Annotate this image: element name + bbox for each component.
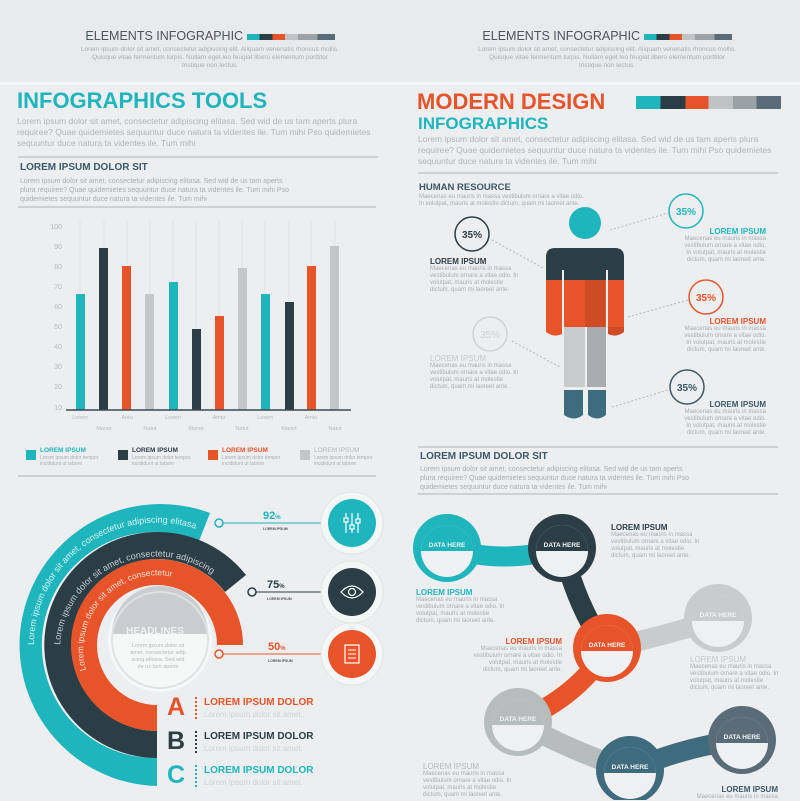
human figure: 35%	[696, 293, 716, 304]
bar chart: Lorem	[72, 415, 88, 421]
text: LOREM IPSUM	[416, 588, 472, 597]
ABC list: Lorem ipsum dolor sit amet.	[204, 710, 303, 719]
text: Maecenas eu mauris in massa vestibulum ornare a vitae odio. In volutpat, mauris at molestie dictum, quam mi laoreet ante.	[474, 646, 562, 673]
network diagram: DATA HERE	[589, 642, 626, 649]
text: LOREM IPSUM	[710, 317, 766, 326]
bar chart: Antu	[121, 415, 133, 421]
ABC list: LOREM IPSUM DOLOR	[204, 697, 313, 708]
intro text left: Lorem ipsum dolor sit amet, consectetur adipiscing elitasa. Sed wid de us tam aperts plura requiree? Quae quidemietes sequuntur duce natura ta videntes ile. Tum mihi Pso quidemietes sequuntur duce natura ta videntes ile. Tum mihi	[17, 116, 370, 148]
text: Lorem ipsum dolor sit amet, consectetur adipiscing elitasa. Sed wid de us tam aperts plura requiree? Quae quidemietes sequuntur duce natura ta videntes ile. Tum mihi Pso quidemietes sequuntur duce natura ta videntes ile. Tum mihi	[20, 178, 289, 203]
header right	[478, 29, 736, 69]
text: Maecenas eu mauris in massa vestibulum ornare a vitae odio. In volutpat, mauris at molestie dictum, quam mi laoreet ante.	[690, 664, 778, 691]
subtitle: INFOGRAPHICS	[418, 114, 548, 133]
bar chart: Natut	[235, 426, 249, 432]
network labels: Maecenas eu mauris in massa vestibulum ornare a vitae odio. In volutpat, mauris at molestie dictum, quam mi laoreet ante.	[611, 532, 699, 559]
legend: LOREM IPSUM	[222, 447, 268, 454]
text: LOREM IPSUM	[423, 762, 479, 771]
subheading right: LOREM IPSUM DOLOR SIT	[420, 451, 548, 462]
network diagram: DATA HERE	[724, 734, 761, 741]
radial chart: Lorem ipsum dolor sit amet, consectetur	[77, 570, 172, 671]
bar chart: Manet	[96, 426, 112, 432]
radial chart: Lorem ipsum dolor sit amet, consectetur adipiscing elitasa	[28, 516, 196, 644]
ABC list: A	[167, 693, 185, 721]
legend: LOREM IPSUM	[132, 447, 178, 454]
header right: Lorem ipsum dolor sit amet, consectetur adipiscing elit. Aliquam venenatis rhoncus mollis. Quisque vitae fermentum turpis. Nullam eget leo feugiat libero elementum porttitor tristique non lectus.	[478, 46, 736, 69]
text: Maecenas eu mauris in massa vestibulum ornare a vitae odio. In volutpat, mauris at molestie dictum, quam mi laoreet ante.	[416, 597, 504, 624]
bar chart: 20	[54, 384, 62, 391]
bar chart: 90	[54, 244, 62, 251]
bar chart: 80	[54, 264, 62, 271]
bar chart: Lorem	[257, 415, 273, 421]
title: infographics tools: INFOGRAPHICS TOOLS	[17, 88, 267, 113]
ABC list: Lorem ipsum dolor sit amet.	[204, 744, 303, 753]
radial chart: LOREM IPSUM	[268, 659, 293, 663]
HR labels: LOREM IPSUM	[430, 257, 486, 266]
text: LOREM IPSUM	[710, 227, 766, 236]
text: Maecenas eu mauris in massa vestibulum ornare a vitae odio. In volutpat, mauris at molestie dictum, quam mi laoreet ante.	[423, 771, 511, 798]
bar chart: Amtu	[305, 415, 317, 421]
legend: Lorem ipsum dolor tempor incididunt ut labore	[314, 455, 372, 467]
legend: Lorem ipsum dolor tempor incididunt ut labore	[222, 455, 280, 467]
bar chart: 50	[54, 324, 62, 331]
legend: Lorem ipsum dolor tempor incididunt ut labore	[132, 455, 190, 467]
text: Lorem ipsum dolor sit amet, consectetur adipiscing elitasa. Sed wid de us tam aperts plura requiree? Quae quidemietes sequuntur duce natura ta videntes ile. Tum mihi Pso quidemietes sequuntur duce natura ta videntes ile. Tum mihi	[418, 134, 771, 166]
legend	[26, 447, 372, 467]
human figure: 35%	[676, 207, 696, 218]
radial chart: 50%	[268, 641, 286, 653]
ABC list: Lorem ipsum dolor sit amet.	[204, 778, 303, 787]
human figure: 35%	[480, 330, 500, 341]
bar chart: Manet	[188, 426, 204, 432]
text: Maecenas eu mauris in massa vestibulum ornare a vitae odio. In volutpat, mauris at molestie dictum, quam mi laoreet ante.	[684, 409, 766, 436]
header band	[0, 0, 800, 85]
radial chart: 92%	[263, 510, 281, 522]
radial chart: 75%	[267, 579, 285, 591]
network diagram: DATA HERE	[700, 612, 737, 619]
header left	[81, 29, 339, 69]
radial chart: Lorem ipsum dolor sit	[132, 643, 185, 649]
text: Maecenas eu mauris in massa	[697, 794, 778, 800]
bar chart: Lorem	[165, 415, 181, 421]
text: LOREM IPSUM	[722, 785, 778, 794]
connectors	[215, 519, 223, 527]
text: LOREM IPSUM	[710, 400, 766, 409]
legend: Lorem ipsum dolor tempor incididunt ut labore	[40, 455, 98, 467]
text: LOREM IPSUM	[506, 637, 562, 646]
bar chart	[50, 220, 351, 432]
text: LOREM IPSUM	[430, 354, 486, 363]
bar chart: Manet	[281, 426, 297, 432]
ABC list: LOREM IPSUM DOLOR	[204, 765, 313, 776]
radial chart: scing elitasa. Sed wid	[132, 657, 184, 663]
legend: LOREM IPSUM	[314, 447, 360, 454]
HR labels: Maecenas eu mauris in massa vestibulum ornare a vitae odio. In volutpat, mauris at molestie dictum, quam mi laoreet ante.	[430, 266, 518, 293]
header left: ELEMENTS INFOGRAPHIC	[85, 29, 243, 43]
network diagram: DATA HERE	[429, 542, 466, 549]
text: Maecenas eu mauris in massa vestibulum ornare a vitae odio. In volutpat, mauris at molestie dictum, quam mi laoreet ante.	[419, 194, 584, 207]
ABC list	[167, 693, 314, 789]
legend: LOREM IPSUM	[40, 447, 86, 454]
bar chart: 100	[50, 224, 62, 231]
bar chart: 30	[54, 364, 62, 371]
human resource: HUMAN RESOURCE	[419, 182, 511, 193]
bar chart: Natut	[328, 426, 342, 432]
network diagram: DATA HERE	[500, 716, 537, 723]
ABC list: B	[167, 727, 185, 755]
bar chart: 70	[54, 284, 62, 291]
ABC list: LOREM IPSUM DOLOR	[204, 731, 313, 742]
teal ring	[20, 504, 210, 786]
ABC list: C	[167, 761, 185, 789]
network diagram: DATA HERE	[612, 764, 649, 771]
icon circles	[321, 492, 383, 554]
headlines circle	[108, 588, 212, 692]
orange ring	[71, 559, 243, 731]
human figure	[454, 193, 724, 418]
bar chart: 10	[54, 405, 62, 412]
network diagram	[413, 514, 776, 800]
network diagram: DATA HERE	[544, 542, 581, 549]
human figure: 35%	[462, 230, 482, 241]
radial chart: LOREM IPSUM	[263, 527, 288, 531]
radial chart	[20, 492, 384, 786]
dark ring	[44, 532, 246, 758]
subheading left: LOREM IPSUM DOLOR SIT	[20, 162, 148, 173]
header left: Lorem ipsum dolor sit amet, consectetur adipiscing elit. Aliquam venenatis rhoncus mollis. Quisque vitae fermentum turpis. Nullam eget leo feugiat libero elementum porttitor tristique non lectus.	[81, 46, 339, 69]
text: Maecenas eu mauris in massa vestibulum ornare a vitae odio. In volutpat, mauris at molestie dictum, quam mi laoreet ante.	[684, 236, 766, 263]
bar chart: Amtu	[213, 415, 225, 421]
radial chart: LOREM IPSUM	[267, 597, 292, 601]
text: Lorem ipsum dolor sit amet, consectetur adipiscing elitasa. Sed wid de us tam aperts plura requiree? Quae quidemietes sequuntur duce natura ta videntes ile. Tum mihi Pso quidemietes sequuntur duce natura ta videntes ile. Tum mihi	[420, 466, 689, 491]
header right: ELEMENTS INFOGRAPHIC	[482, 29, 640, 43]
bar chart: 40	[54, 344, 62, 351]
text: Maecenas eu mauris in massa vestibulum ornare a vitae odio. In volutpat, mauris at molestie dictum, quam mi laoreet ante.	[684, 326, 766, 353]
bar chart: 60	[54, 304, 62, 311]
text: Maecenas eu mauris in massa vestibulum ornare a vitae odio. In volutpat, mauris at molestie dictum, quam mi laoreet ante.	[430, 363, 518, 390]
radial chart: Lorem ipsum dolor sit amet, consectetur adipiscing	[54, 550, 214, 644]
network labels: LOREM IPSUM	[611, 523, 667, 532]
text: LOREM IPSUM	[690, 655, 746, 664]
title: modern design: MODERN DESIGN	[417, 89, 605, 114]
radial chart: HEADLINES	[126, 626, 184, 637]
radial chart: amet, consectetur adip	[130, 650, 186, 656]
color strip	[636, 96, 781, 109]
radial chart: de us tam aperts	[138, 664, 179, 670]
human figure: 35%	[677, 383, 697, 394]
bar chart: Natut	[143, 426, 157, 432]
